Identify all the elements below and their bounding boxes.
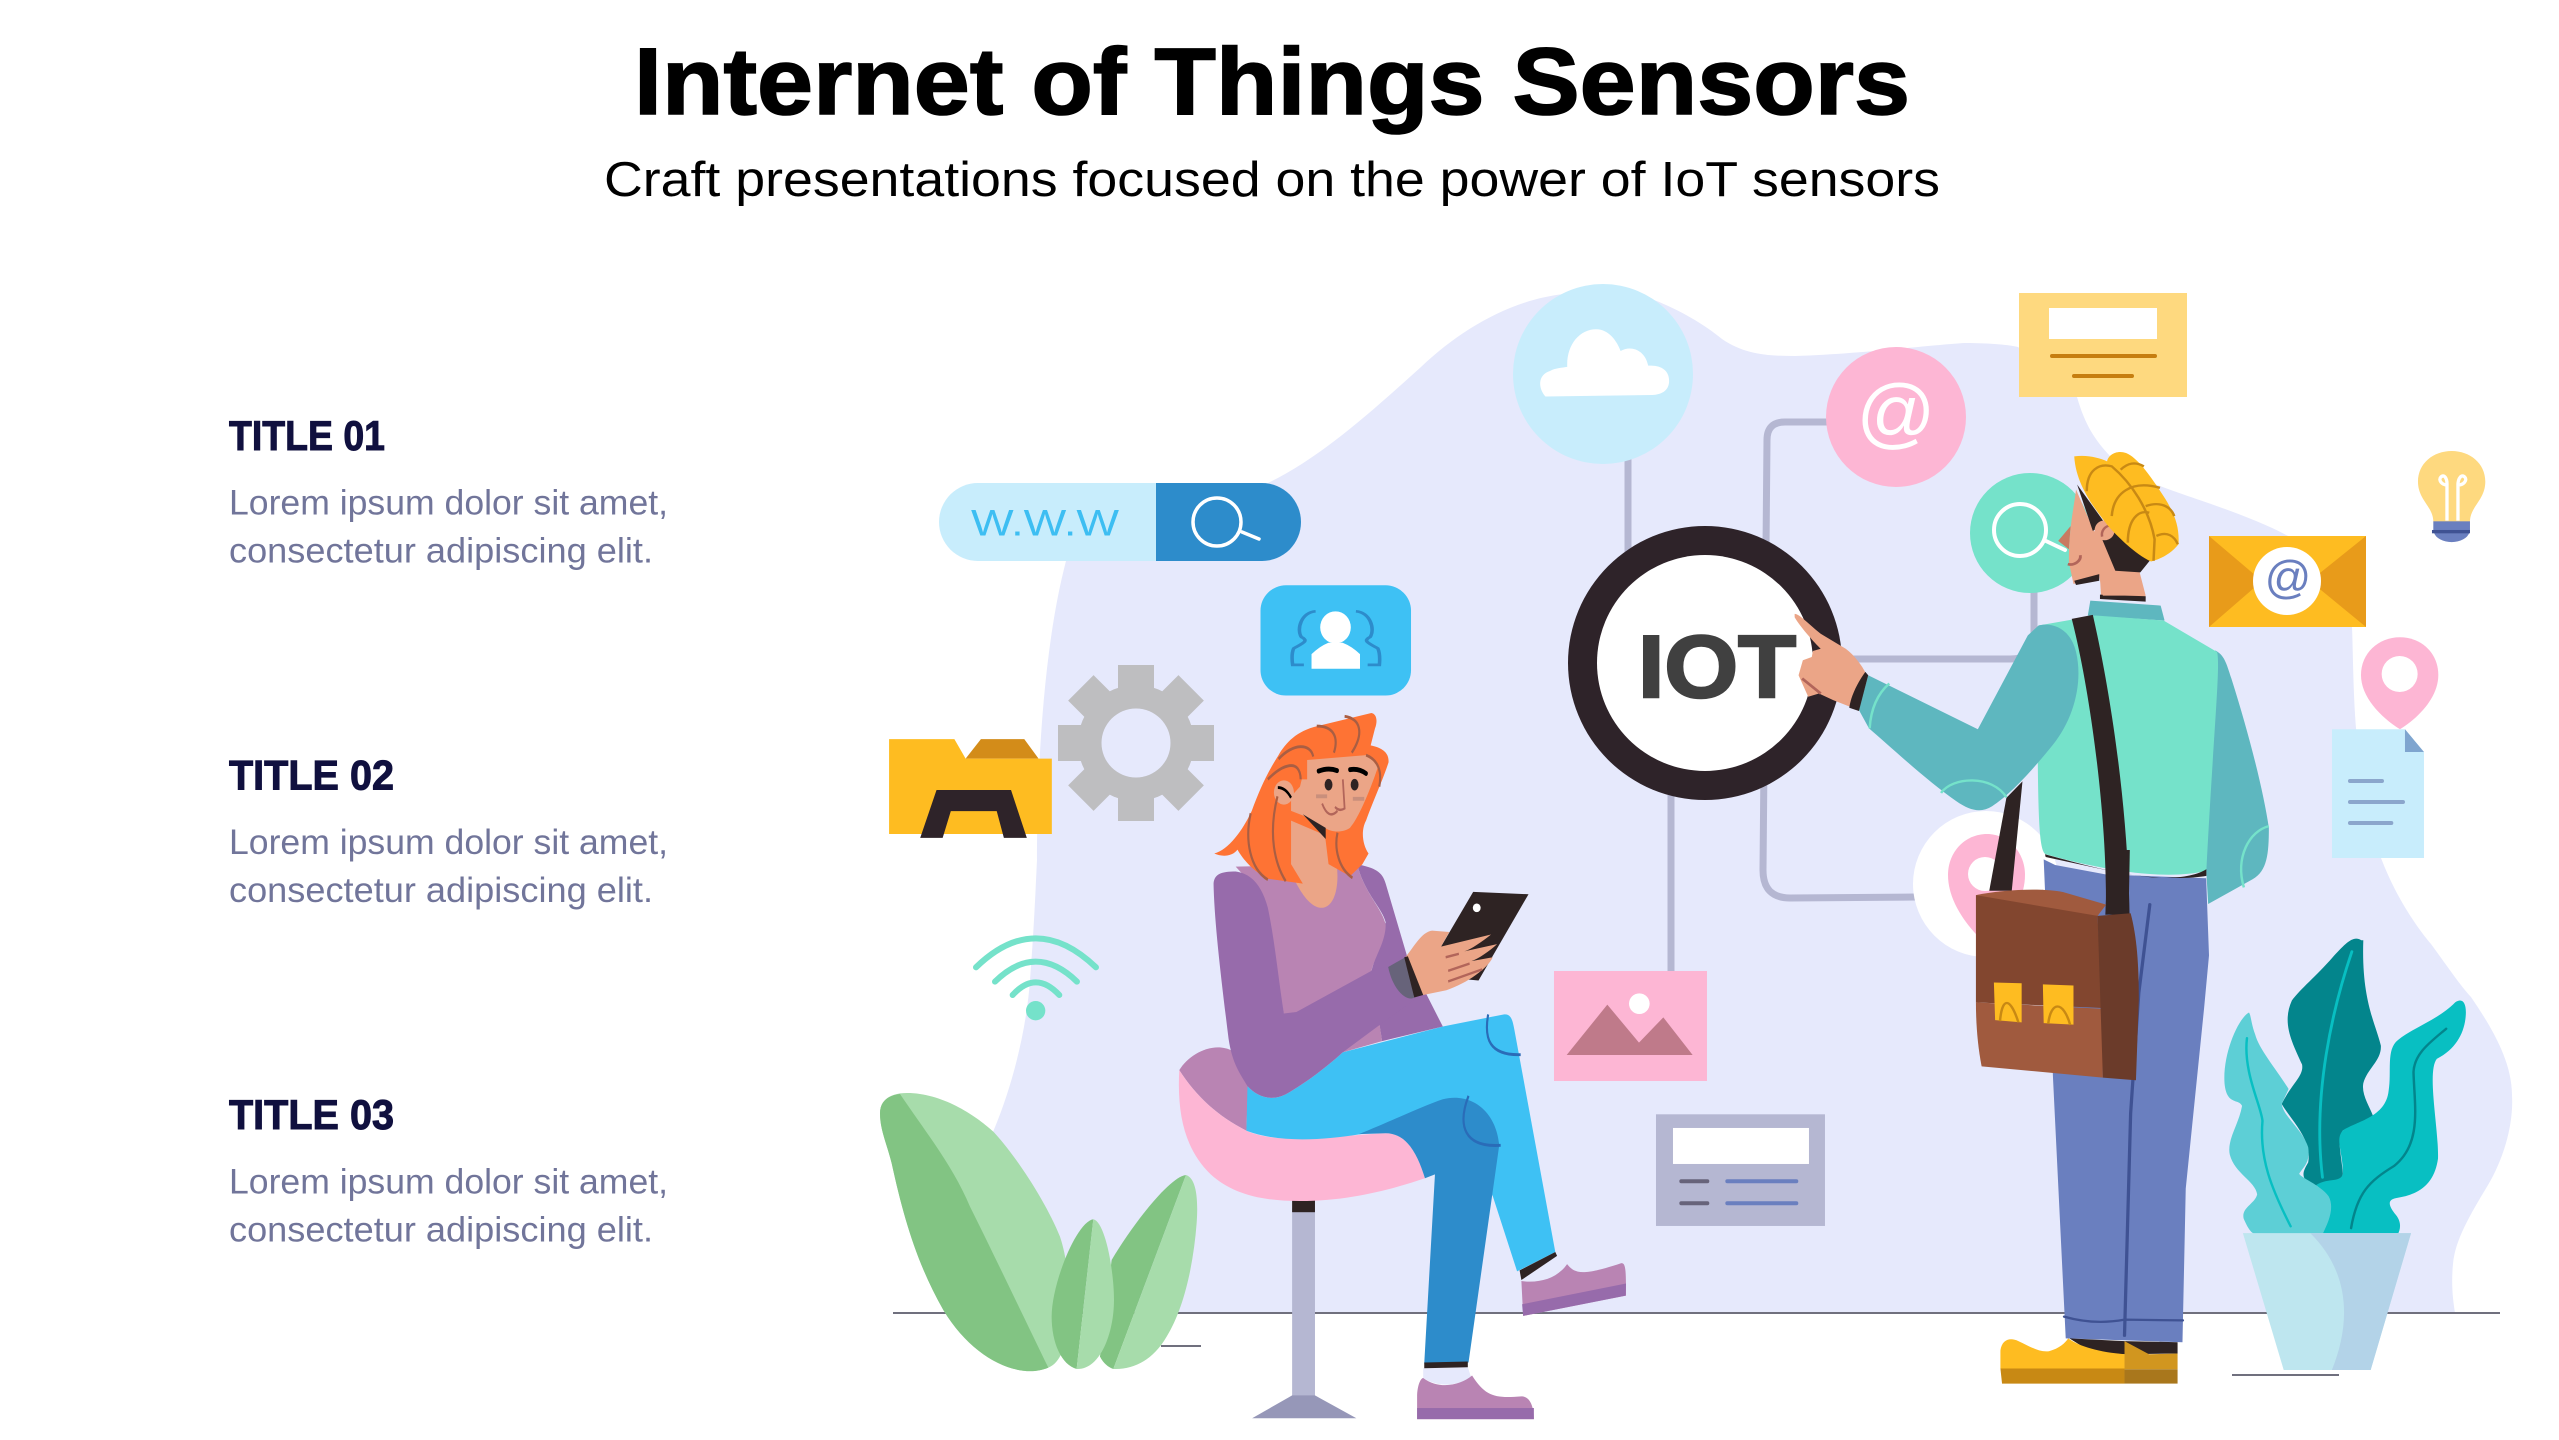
neck <box>1289 801 1337 908</box>
search bar <box>939 483 1301 561</box>
trousers <box>2044 859 2209 1342</box>
icon: wifi <box>976 938 1096 1020</box>
plant: green leaves <box>880 1093 1197 1371</box>
woman on chair <box>1179 713 1626 1419</box>
IOT badge <box>1568 526 1842 800</box>
icon: yellow message card <box>2019 293 2187 397</box>
chair <box>1179 1047 1425 1418</box>
arm and hand <box>1795 614 2078 810</box>
heading 03: TITLE 03 <box>229 1091 394 1138</box>
bag <box>1976 850 2139 1080</box>
trousers <box>1246 1014 1555 1363</box>
icon: cloud bubble <box>1513 284 1693 464</box>
search icon <box>1193 498 1259 546</box>
face <box>1248 716 1380 881</box>
shirt <box>1989 566 2269 917</box>
icon: gray content card <box>1656 1114 1825 1226</box>
background blob <box>962 292 2512 1313</box>
icon: gear <box>1058 665 1214 821</box>
body 01 <box>229 484 668 570</box>
icon: envelope <box>2209 536 2366 627</box>
icon: magnifier bubble <box>1970 473 2090 593</box>
IOT label: IOT <box>1638 617 1796 716</box>
white pin bubble <box>1913 811 2059 957</box>
icon: folder <box>889 739 1052 838</box>
icon: at-sign bubble <box>1826 347 1966 487</box>
hair <box>1214 713 1389 884</box>
man with bag <box>1795 452 2269 1384</box>
title: Internet of Things Sensors <box>634 29 1910 135</box>
icon: users tile <box>1261 585 1411 696</box>
shoes <box>1417 1252 1626 1419</box>
body 02: Lorem ipsum dolor sit amet, <box>229 823 668 862</box>
icon: document <box>2332 729 2424 858</box>
heading 01: TITLE 01 <box>229 412 385 459</box>
text block: title 03 <box>229 1091 668 1250</box>
body 03: consectetur adipiscing elit. <box>229 1210 653 1250</box>
connector lines <box>1628 390 2034 972</box>
head <box>2058 452 2179 596</box>
icon: location pin <box>2361 637 2438 729</box>
subtitle: Craft presentations focused on the power of IoT sensors <box>604 153 1940 207</box>
icon: light bulb <box>2418 451 2485 542</box>
body 03: Lorem ipsum dolor sit amet, <box>229 1162 668 1202</box>
body 03 <box>229 1162 668 1250</box>
icon: envelope: @ <box>2265 551 2311 603</box>
body 01: consectetur adipiscing elit. <box>229 532 653 570</box>
heading 02: TITLE 02 <box>229 752 394 798</box>
tablet and hand <box>1404 892 1529 997</box>
body 02: consectetur adipiscing elit. <box>229 871 653 910</box>
body 02 <box>229 823 668 910</box>
icon: at-sign bubble: @ <box>1856 368 1936 456</box>
text block: title 01 <box>229 412 668 570</box>
text block: title 02 <box>229 752 668 910</box>
floor lines <box>893 1313 2500 1375</box>
shoes <box>2000 1338 2178 1384</box>
plant: teal in pot <box>2224 939 2466 1370</box>
sweater <box>1214 864 1443 1098</box>
body 01: Lorem ipsum dolor sit amet, <box>229 484 668 522</box>
icon: image card <box>1554 971 1707 1081</box>
search bar text: W.W.W <box>971 502 1119 544</box>
